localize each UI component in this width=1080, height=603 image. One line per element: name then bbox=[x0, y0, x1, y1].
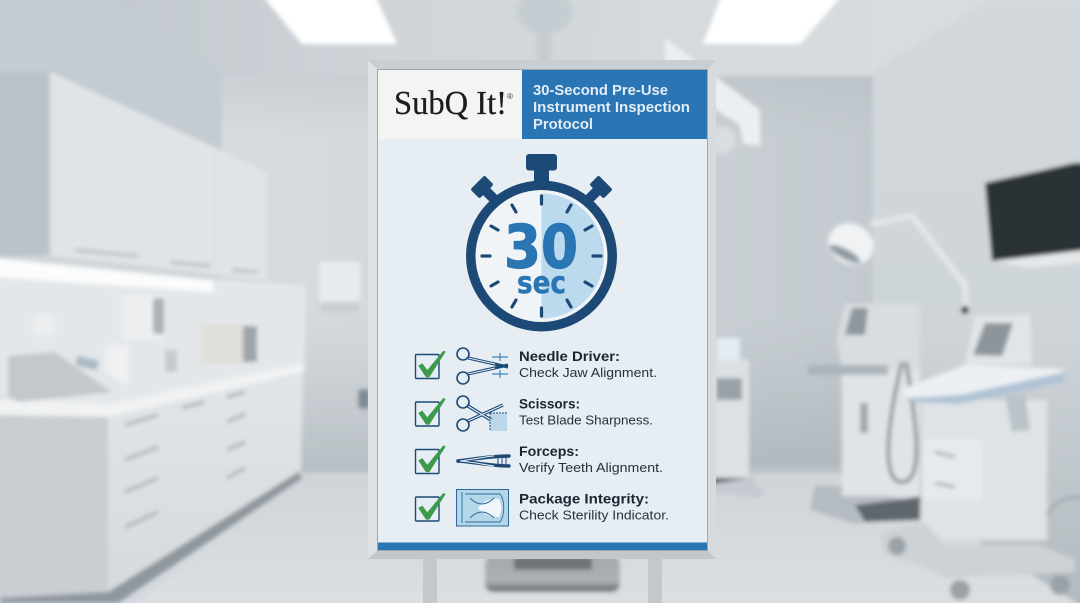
wall fitting bbox=[358, 389, 370, 409]
registered mark: ® bbox=[507, 92, 513, 101]
right cart bbox=[716, 338, 740, 360]
item text: Package Integrity: bbox=[519, 490, 649, 506]
checkbox bbox=[416, 354, 439, 378]
second machine base bbox=[880, 523, 1075, 578]
easel base unit bbox=[485, 556, 620, 592]
check mark bbox=[418, 351, 446, 377]
back wall bbox=[222, 76, 873, 472]
checklist item: forceps bbox=[416, 443, 663, 475]
check mark bbox=[418, 493, 446, 520]
poster stand legs bbox=[423, 556, 662, 603]
ceiling fixture bbox=[490, 0, 605, 62]
floor bbox=[130, 472, 1080, 603]
item text: Forceps: bbox=[519, 443, 579, 459]
icon: sterile package bbox=[456, 490, 508, 526]
crown bbox=[526, 154, 557, 170]
lamp bbox=[870, 216, 966, 310]
right wall bbox=[873, 0, 1080, 603]
lower cabinet front bbox=[108, 372, 303, 592]
second machine bbox=[965, 315, 1032, 365]
ceiling bbox=[100, 0, 995, 78]
check mark bbox=[418, 446, 446, 472]
lower cabinet side bbox=[0, 415, 108, 600]
poster frame bbox=[368, 60, 716, 559]
header title block bbox=[522, 70, 707, 139]
logo text: SubQ It! bbox=[394, 85, 507, 122]
surgical arm bbox=[665, 38, 760, 146]
countertop bbox=[0, 363, 305, 420]
bottom blue bar bbox=[378, 542, 707, 550]
checklist item: needle driver bbox=[416, 348, 657, 384]
sec label: sec bbox=[517, 266, 566, 301]
item text: Scissors: bbox=[519, 396, 580, 412]
side buttons bbox=[470, 175, 501, 206]
icon: needle driver bbox=[457, 348, 508, 384]
item text: Needle Driver: bbox=[519, 348, 620, 364]
upper cabinet bbox=[0, 72, 50, 257]
header logo block bbox=[378, 70, 522, 139]
first machine bbox=[810, 485, 920, 524]
checklist item: needle driver: Check Jaw Alignment. bbox=[519, 365, 657, 380]
tick marks bbox=[482, 196, 601, 316]
left wall bbox=[0, 0, 222, 600]
ceiling lights bbox=[262, 0, 397, 44]
drawer handles bbox=[125, 392, 245, 527]
icon: scissors bbox=[457, 396, 508, 431]
backsplash bbox=[0, 258, 305, 410]
check mark bbox=[418, 398, 446, 425]
checkbox bbox=[416, 402, 439, 426]
checklist item: forceps: Verify Teeth Alignment. bbox=[519, 460, 663, 475]
header title block: Protocol bbox=[533, 117, 593, 133]
icon: forceps bbox=[458, 456, 509, 466]
checklist item: package integrity bbox=[416, 490, 669, 526]
monitor bbox=[985, 163, 1080, 261]
left countertop items bbox=[122, 295, 162, 340]
header title block: Instrument Inspection bbox=[533, 100, 690, 116]
header title block: 30-Second Pre-Use bbox=[533, 83, 668, 99]
dial bbox=[466, 180, 617, 332]
checkbox bbox=[416, 450, 439, 474]
poster bbox=[368, 60, 716, 559]
checkbox bbox=[416, 497, 439, 521]
wall dispenser bbox=[319, 262, 360, 312]
poster panel bbox=[378, 70, 707, 550]
stopwatch icon bbox=[466, 154, 617, 332]
checklist item: scissors: Test Blade Sharpness. bbox=[519, 412, 653, 428]
checklist item: scissors bbox=[416, 396, 653, 431]
checklist item: package integrity: Check Sterility Indicator. bbox=[519, 508, 669, 522]
30 value: 30 bbox=[504, 212, 578, 282]
left machine bbox=[8, 352, 113, 402]
